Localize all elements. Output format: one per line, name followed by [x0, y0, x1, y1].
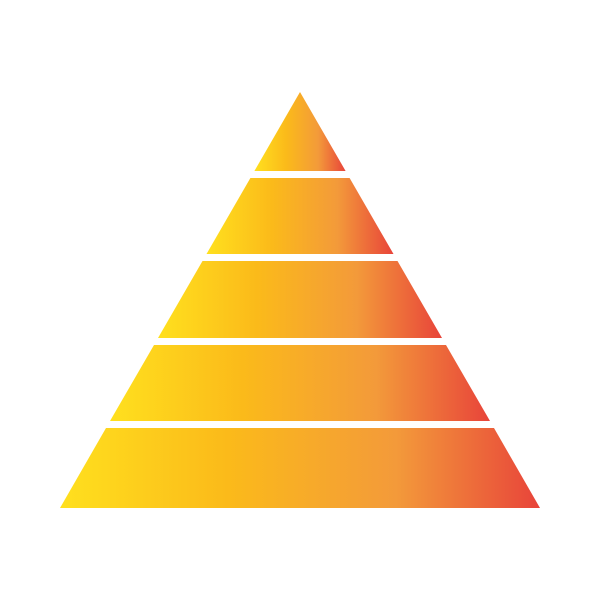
pyramid layer 3 — [158, 261, 442, 338]
pyramid layer 2 — [206, 178, 394, 254]
pyramid layer 5 (base) — [60, 428, 540, 508]
pyramid layer 1 (top) — [254, 92, 346, 171]
pyramid layer 4 — [110, 345, 490, 421]
